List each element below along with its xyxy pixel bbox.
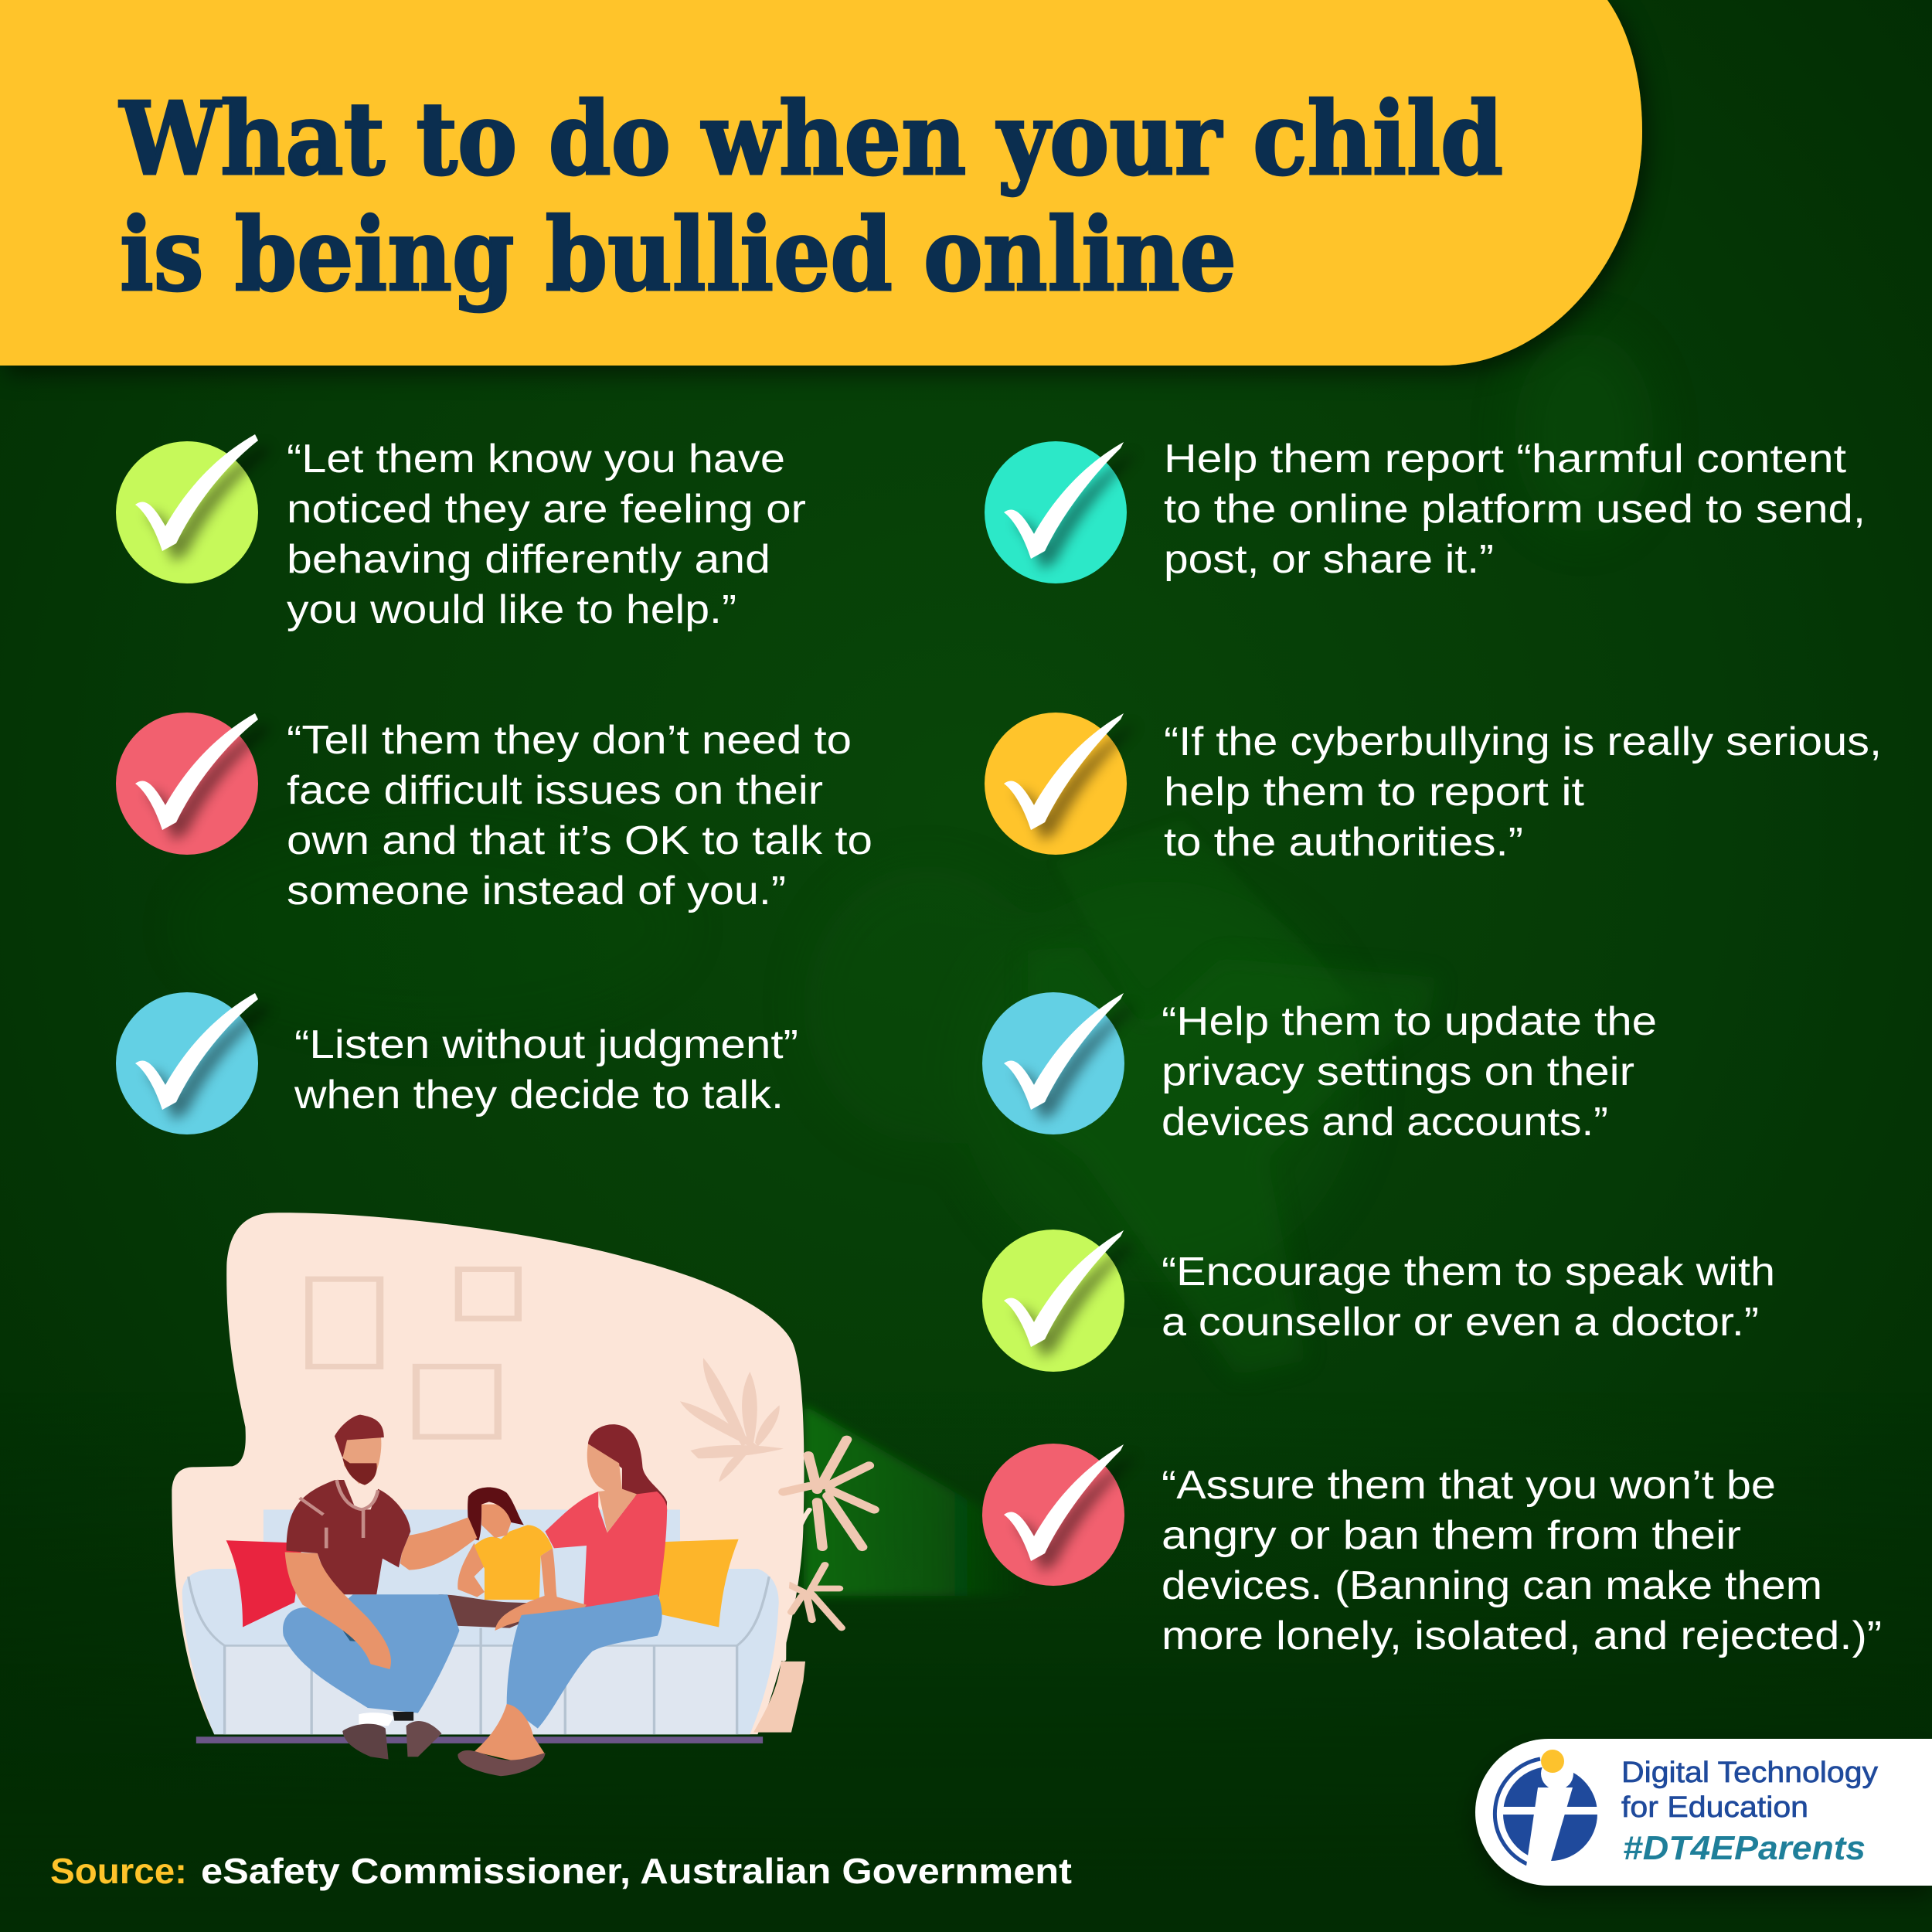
- item 5: right check and text: to the authorities.”: [1164, 820, 1523, 865]
- item 2: left check and text: [116, 713, 872, 913]
- item 2: left check and text: own and that it’s OK to talk to: [287, 818, 872, 863]
- item 1: left check and text: noticed they are feeling or: [287, 487, 806, 532]
- title: What to do when your child: [118, 80, 1503, 198]
- item 1: left check and text: “Let them know you have: [287, 437, 785, 481]
- item 6: right check and text: privacy settings on their: [1162, 1049, 1634, 1094]
- item 7: right check and text: a counsellor or even a doctor.”: [1162, 1300, 1759, 1345]
- item 8: right check and text: angry or ban them from their: [1162, 1513, 1741, 1558]
- logo text: Digital Technology: [1621, 1757, 1878, 1789]
- item 8: right check and text: [982, 1444, 1882, 1658]
- wall frames: [309, 1269, 518, 1437]
- father: [283, 1415, 477, 1760]
- item 7: right check and text: [982, 1230, 1775, 1372]
- item 1: left check and text: behaving differently and: [287, 537, 770, 582]
- item 2: left check and text: face difficult issues on their: [287, 768, 823, 813]
- item 4: right check and text: [985, 437, 1866, 583]
- item 4: right check and text: Help them report “harmful content: [1164, 437, 1847, 481]
- title: [118, 80, 1503, 314]
- room and sofa: [172, 1213, 874, 1743]
- item 2: left check and text: someone instead of you.”: [287, 869, 786, 913]
- wall blob: [172, 1213, 804, 1734]
- item 6: right check and text: devices and accounts.”: [1162, 1100, 1608, 1145]
- item 5: right check and text: “If the cyberbullying is really serious,: [1164, 719, 1882, 764]
- side plant: [784, 1440, 874, 1659]
- child: [435, 1488, 557, 1628]
- wall plant: [680, 1358, 784, 1482]
- item 3: left check and text: “Listen without judgment”: [294, 1022, 798, 1067]
- item 1: left check and text: [116, 434, 806, 632]
- title: is being bullied online: [120, 196, 1236, 314]
- sofa: [182, 1510, 779, 1734]
- logo text: [1621, 1757, 1878, 1867]
- item 7: right check and text: “Encourage them to speak with: [1162, 1250, 1775, 1294]
- logo text: for Education: [1621, 1791, 1808, 1824]
- source line: eSafety Commissioner, Australian Government: [201, 1851, 1072, 1891]
- item 2: left check and text: “Tell them they don’t need to: [287, 718, 852, 763]
- item 8: right check and text: devices. (Banning can make them: [1162, 1563, 1822, 1608]
- item 3: left check and text: when they decide to talk.: [294, 1073, 784, 1117]
- item 6: right check and text: [982, 992, 1657, 1145]
- cushions: [226, 1540, 302, 1627]
- source line: Source:: [50, 1851, 187, 1891]
- item 8: right check and text: “Assure them that you won’t be: [1162, 1463, 1776, 1508]
- header banner: [0, 0, 1642, 366]
- logo text: #DT4EParents: [1623, 1829, 1866, 1867]
- item 4: right check and text: post, or share it.”: [1164, 537, 1494, 582]
- item 6: right check and text: “Help them to update the: [1162, 999, 1657, 1044]
- item 5: right check and text: help them to report it: [1164, 770, 1585, 815]
- illustration: family on sofa: [172, 1213, 874, 1776]
- item 4: right check and text: to the online platform used to send,: [1164, 487, 1866, 532]
- item 5: right check and text: [985, 713, 1882, 865]
- floor line: [196, 1736, 763, 1743]
- mother: [457, 1424, 667, 1776]
- people: [283, 1415, 667, 1776]
- item 8: right check and text: more lonely, isolated, and rejected.)”: [1162, 1614, 1882, 1658]
- plant pot: [753, 1662, 805, 1733]
- item 3: left check and text: [116, 992, 798, 1134]
- item 1: left check and text: you would like to help.”: [287, 587, 736, 632]
- logo icon: [1495, 1750, 1604, 1866]
- logo pill: [1475, 1739, 1932, 1886]
